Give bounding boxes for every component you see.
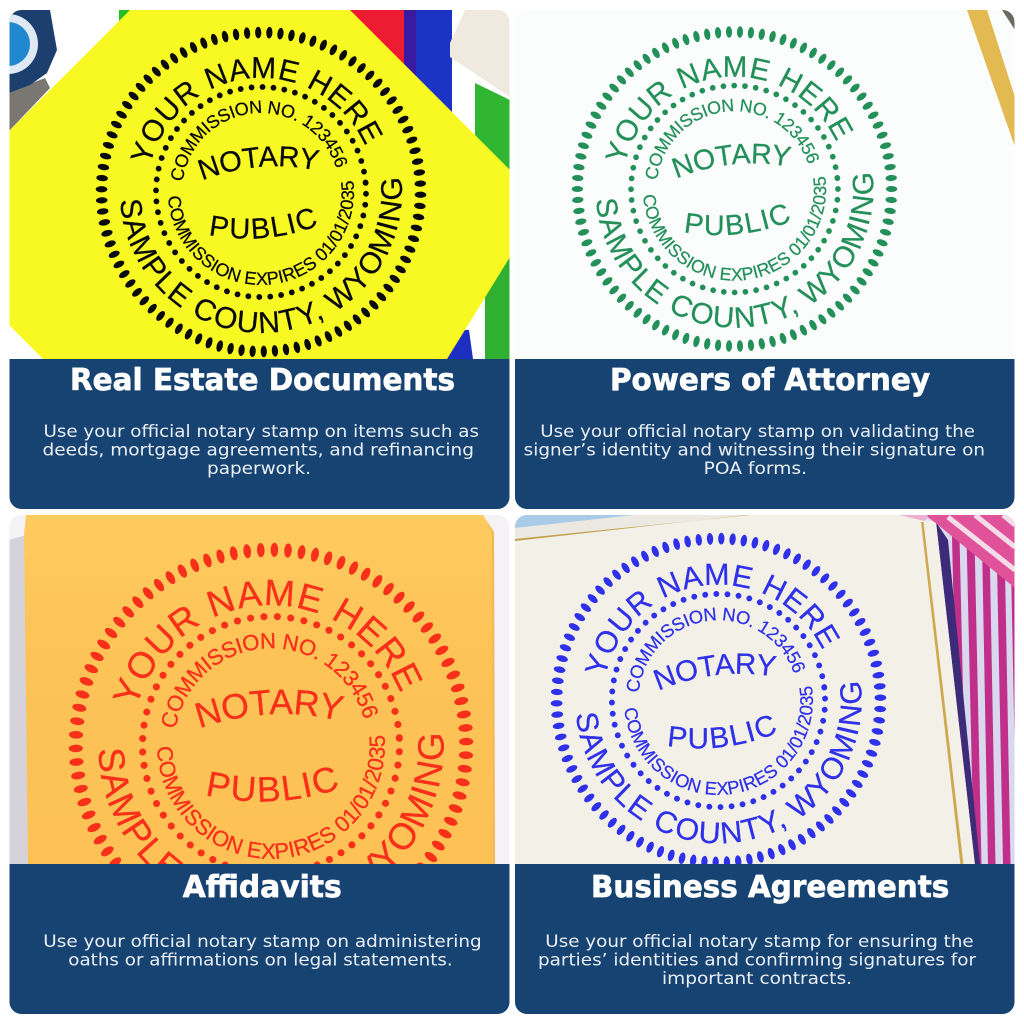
stamp impression: black notary seal bbox=[96, 26, 426, 358]
heading: Real Estate Documents bbox=[70, 363, 455, 398]
description bbox=[42, 422, 479, 479]
stamp impression: red notary seal: COMMISSION NO. 123456 bbox=[162, 632, 378, 727]
stamp impression: blue notary seal: COMMISSION EXPIRES 01/01/2035 bbox=[624, 686, 814, 796]
description: deeds, mortgage agreements, and refinancing bbox=[42, 440, 474, 460]
panel: real estate documents bbox=[10, 10, 510, 509]
stamp impression: blue notary seal bbox=[550, 532, 886, 864]
stamp impression: green notary seal: SAMPLE COUNTY, WYOMING bbox=[596, 174, 874, 328]
stamp impression: blue notary seal: PUBLIC bbox=[668, 716, 776, 749]
stamp impression: black notary seal: PUBLIC bbox=[210, 208, 316, 239]
description: oaths or affirmations on legal statements. bbox=[68, 950, 453, 970]
description: Use your official notary stamp for ensuring the bbox=[545, 932, 974, 952]
description: Use your official notary stamp on validating the bbox=[540, 422, 975, 442]
photo: yellow paper with scissors and markers bbox=[0, 10, 510, 360]
photo: cream card with gold border and striped ribbon bbox=[515, 515, 1024, 865]
description bbox=[43, 932, 482, 970]
heading: Business Agreements bbox=[591, 870, 949, 905]
stamp impression: red notary seal: PUBLIC bbox=[208, 767, 338, 802]
photo: white paper with gold ribbon bbox=[967, 10, 1014, 146]
caption card: powers of attorney bbox=[515, 359, 1014, 509]
caption card: affidavits bbox=[10, 864, 510, 1014]
stamp impression: black notary seal: NOTARY bbox=[198, 146, 320, 180]
stamp impression: black notary seal: SAMPLE COUNTY, WYOMING bbox=[120, 179, 402, 334]
stamp impression: red notary seal bbox=[68, 542, 474, 864]
description: POA forms. bbox=[704, 459, 807, 479]
description: Use your official notary stamp on administering bbox=[43, 932, 482, 952]
panel: powers of attorney bbox=[515, 10, 1014, 509]
stamp impression: green notary seal: NOTARY bbox=[672, 144, 792, 178]
stamp impression: green notary seal: COMMISSION NO. 123456 bbox=[646, 98, 819, 179]
description bbox=[524, 422, 985, 479]
stamp impression: blue notary seal: COMMISSION NO. 123456 bbox=[626, 608, 805, 692]
description: signer’s identity and witnessing their signature on bbox=[524, 440, 985, 460]
panel: affidavits bbox=[10, 515, 510, 1014]
description: parties’ identities and confirming signatures for bbox=[538, 950, 976, 970]
panel: business agreements bbox=[515, 515, 1014, 1014]
caption card: real estate documents bbox=[10, 359, 510, 509]
photo: orange sticky notes bbox=[9, 515, 510, 865]
stamp impression: red notary seal: SAMPLE COUNTY, WYOMING bbox=[98, 735, 444, 864]
stamp impression: red notary seal: YOUR NAME HERE bbox=[112, 580, 423, 698]
stamp impression: blue notary seal: YOUR NAME HERE bbox=[584, 564, 840, 671]
stamp impression: black notary seal: YOUR NAME HERE bbox=[130, 57, 383, 158]
stamp impression: black notary seal: COMMISSION NO. 123456 bbox=[171, 100, 348, 180]
stamp impression: black notary seal: COMMISSION EXPIRES 01/01/2035 bbox=[168, 181, 354, 286]
stamp impression: green notary seal: COMMISSION EXPIRES 01/01/2035 bbox=[644, 176, 826, 281]
stamp impression: green notary seal bbox=[572, 26, 898, 352]
description: important contracts. bbox=[662, 969, 852, 989]
heading: Affidavits bbox=[183, 870, 342, 905]
stamp impression: red notary seal: NOTARY bbox=[195, 690, 345, 728]
stamp impression: red notary seal: COMMISSION EXPIRES 01/01/2035 bbox=[157, 736, 386, 860]
description bbox=[538, 932, 976, 989]
description: paperwork. bbox=[207, 459, 311, 479]
description: Use your official notary stamp on items such as bbox=[44, 422, 479, 442]
stamp impression: green notary seal: YOUR NAME HERE bbox=[605, 56, 854, 158]
stamp impression: green notary seal: PUBLIC bbox=[686, 204, 790, 236]
heading: Powers of Attorney bbox=[610, 363, 930, 398]
stamp impression: blue notary seal: NOTARY bbox=[653, 653, 777, 690]
caption card: business agreements bbox=[515, 864, 1014, 1014]
stamp impression: blue notary seal: SAMPLE COUNTY, WYOMING bbox=[576, 682, 862, 844]
